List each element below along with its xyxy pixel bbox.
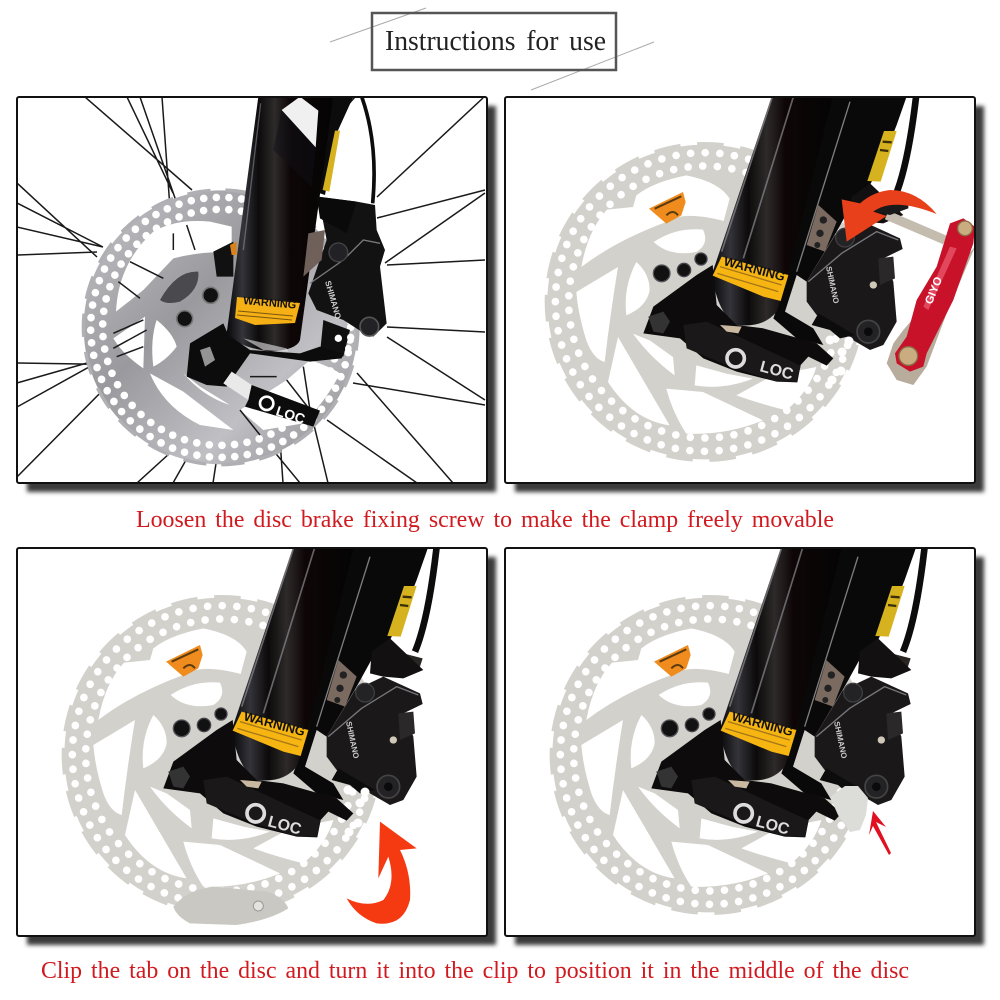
curved red arrow <box>347 822 417 924</box>
caption: clip the tab: Clip the tab on the disc and turn it into the clip to position it in the middle of the disc <box>41 958 909 984</box>
caliper brand: SHIMANO <box>824 266 841 304</box>
panel: step 4 tab in clip <box>505 547 984 945</box>
warning sticker <box>233 708 308 756</box>
curved red arrow <box>842 190 937 242</box>
warning sticker: WARNING <box>242 708 307 739</box>
multi tool: GIYO <box>923 275 945 306</box>
brake disc <box>547 144 863 460</box>
title box <box>330 8 654 90</box>
caption: loosen screw: Loosen the disc brake fixing screw to make the clamp freely movable <box>136 507 834 533</box>
silver tab <box>173 887 288 925</box>
clear plastic tab <box>830 786 868 832</box>
warning sticker <box>235 295 300 325</box>
fork and caliper <box>651 547 925 837</box>
caliper brand: SHIMANO <box>344 721 361 759</box>
brake disc <box>64 597 380 913</box>
fork and caliper <box>163 547 437 837</box>
dropout and QLOC lever <box>187 323 343 427</box>
brake disc <box>83 190 358 465</box>
fork leg <box>227 97 374 352</box>
warning sticker <box>713 253 788 301</box>
title box: Instructions for use <box>385 25 606 57</box>
multi tool <box>875 200 975 385</box>
wheel spokes <box>17 97 485 483</box>
dropout and QLOC lever: LOC <box>274 403 307 427</box>
caliper brand: SHIMANO <box>832 721 849 759</box>
panel: step 2 loosen screw with tool <box>505 92 984 492</box>
caliper <box>303 197 387 357</box>
small red arrow <box>869 811 891 855</box>
brake disc <box>552 597 868 913</box>
lever brand: LOC <box>758 358 795 384</box>
warning sticker: WARNING <box>730 708 795 739</box>
caliper: SHIMANO <box>323 279 344 321</box>
exposed disc holes <box>344 786 370 836</box>
exposed disc holes <box>826 336 854 384</box>
panel: step 3 clip tab on disc <box>17 547 496 945</box>
warning sticker: WARNING <box>722 253 787 284</box>
fork and caliper <box>643 92 917 382</box>
warning sticker: WARNING <box>243 295 297 312</box>
warning sticker <box>721 708 796 756</box>
lever brand: LOC <box>266 813 303 839</box>
lever brand: LOC <box>754 813 791 839</box>
panel: step 1 full wheel view <box>17 97 496 492</box>
